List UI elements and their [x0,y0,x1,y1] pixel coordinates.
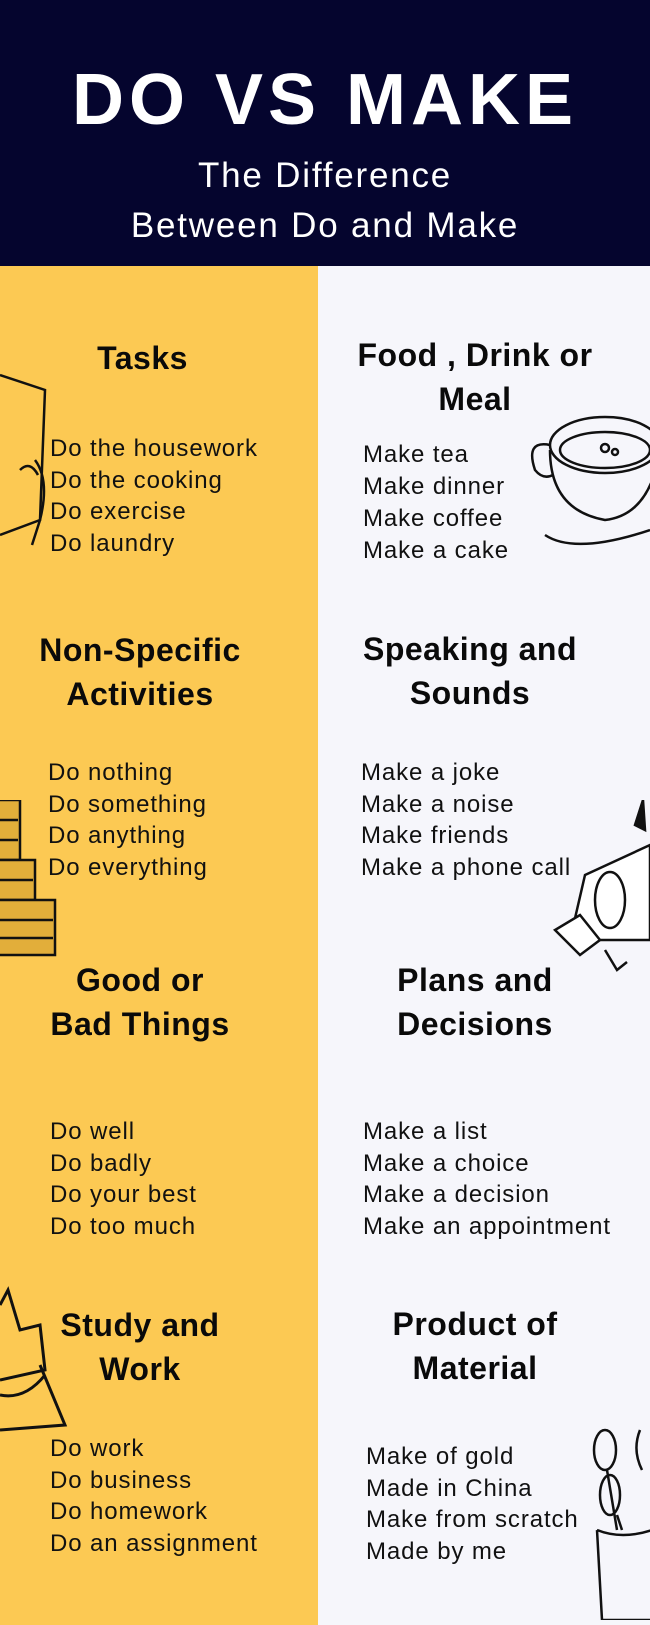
heading: Good or Bad Things: Good or [76,962,204,998]
subtitle [131,156,519,245]
heading: Product of Material: Material [413,1350,537,1386]
list: product [366,1443,579,1564]
list: good or bad: Do your best [50,1181,197,1208]
list: speaking: Make a noise [361,790,515,818]
list: study: Do work [50,1435,144,1462]
heading: Speaking and Sounds [363,631,577,711]
icon: soup bowl [530,416,650,546]
heading: Plans and Decisions: Plans and [397,962,553,998]
list: study: Do an assignment [50,1530,258,1556]
list: study: Do business [50,1466,192,1494]
heading: Product of Material: Product of [392,1306,557,1342]
icon: open book [0,1286,68,1432]
subtitle: The Difference [198,156,452,195]
list: non-specific: Do anything [48,822,186,849]
list: speaking: Make a joke [361,759,500,786]
heading: Study and Work: Study and [60,1307,220,1343]
list: plans: Make an appointment [363,1212,611,1240]
heading: Tasks: Tasks [97,340,188,376]
list: good or bad: Do badly [50,1150,152,1176]
heading: Speaking and Sounds: Sounds [410,675,530,711]
icon: notebook in hand [0,374,46,546]
heading: Product of Material [392,1306,558,1386]
icon: megaphone [553,800,650,972]
list: plans: Make a list [363,1118,488,1145]
heading: Non-Specific Activities: Non-Specific [39,632,241,668]
heading: Food, Drink or Meal [357,337,593,417]
list: food: Make a cake [363,537,509,564]
list: product: Made by me [366,1538,507,1564]
heading: Plans and Decisions: Decisions [397,1006,553,1042]
list: tasks: Do exercise [50,498,187,525]
list: non-specific: Do something [48,790,207,818]
heading: Non-Specific Activities [39,632,241,712]
heading: Good or Bad Things [50,962,230,1042]
list: plans [363,1118,611,1240]
icon: stack of books [0,800,56,956]
list: plans: Make a decision [363,1181,550,1208]
list: product: Make from scratch [366,1506,579,1533]
list: tasks [50,435,258,556]
heading: Study and Work [60,1307,220,1387]
heading: Plans and Decisions [397,962,553,1042]
heading: Speaking and Sounds: Speaking and [363,631,577,667]
list: study: Do homework [50,1498,208,1525]
header banner [0,0,650,266]
heading: Study and Work: Work [99,1351,181,1387]
list: product: Made in China [366,1474,532,1502]
list: speaking [361,759,571,880]
list: tasks: Do the cooking [50,466,223,494]
list: speaking: Make friends [361,822,509,849]
heading: Food, Drink or Meal: Meal [438,381,512,417]
subtitle: Between Do and Make [131,206,519,245]
list: tasks: Do laundry [50,530,175,556]
list: food [363,441,509,564]
list: food: Make coffee [363,505,503,532]
heading: Non-Specific Activities: Activities [66,676,214,712]
list: non-specific: Do everything [48,854,208,880]
list: product: Make of gold [366,1443,514,1470]
title: DO VS MAKE [72,60,578,140]
heading: Food, Drink or Meal: Food , Drink or [357,337,593,373]
list: plans: Make a choice [363,1150,529,1176]
list: good or bad: Do too much [50,1212,196,1240]
list: non-specific: Do nothing [48,759,173,786]
list: tasks: Do the housework [50,435,258,462]
list: food: Make tea [363,441,469,468]
list: study [50,1435,258,1556]
icon: utensil jar [592,1428,650,1620]
list: speaking: Make a phone call [361,854,571,880]
list: good or bad [50,1118,197,1240]
list: non-specific [48,759,208,880]
list: good or bad: Do well [50,1118,135,1145]
list: food: Make dinner [363,473,505,500]
panel: do column [0,266,318,1625]
heading: Good or Bad Things: Bad Things [50,1006,230,1042]
